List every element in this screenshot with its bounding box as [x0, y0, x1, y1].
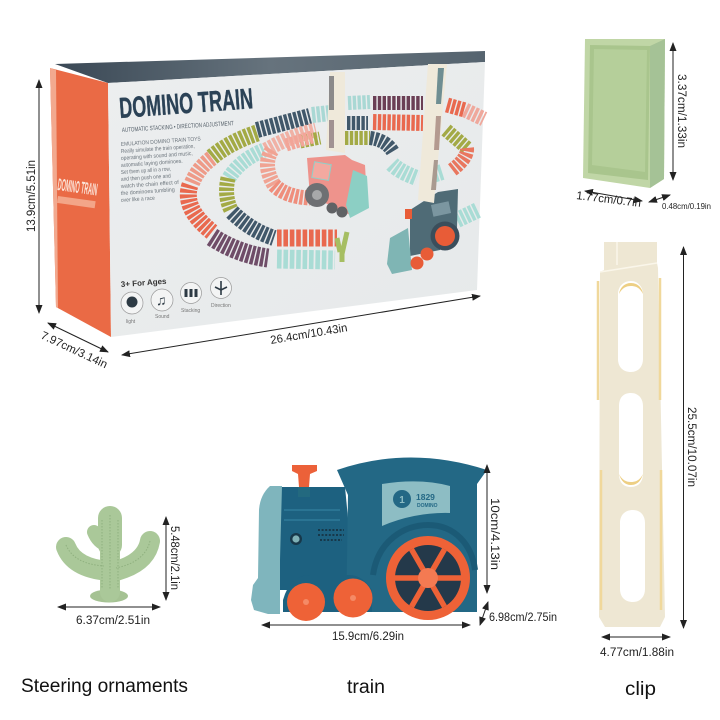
- icon: sound: Sound: [155, 314, 170, 320]
- train nameplate: 1829: [416, 492, 435, 502]
- box description: Really simulate the train operation,: [121, 144, 195, 155]
- dimension: clip height: 25.5cm/10.07in: [685, 407, 697, 487]
- dimension: domino thickness: 0.48cm/0.19in: [662, 202, 711, 211]
- dimension: clip width: 4.77cm/1.88in: [600, 647, 674, 659]
- caption: steering ornaments: Steering ornaments: [21, 676, 188, 697]
- dimension: train depth: [480, 602, 557, 625]
- dimension: cactus height: [166, 517, 180, 600]
- domino track: [188, 102, 484, 262]
- feature icons: [121, 278, 232, 325]
- train main wheel: [386, 536, 470, 620]
- small cactus ornament on box: [337, 232, 347, 262]
- train nameplate: [382, 481, 450, 526]
- box description: operating with sound and music,: [121, 151, 193, 162]
- box description: Set them up all in a row,: [121, 166, 171, 176]
- dimension: box depth: 7.97cm/3.14in: [39, 330, 109, 371]
- box subtitle: AUTOMATIC STACKING • DIRECTION ADJUSTMENT: [122, 120, 234, 134]
- ages heading: 3+ For Ages: [121, 277, 167, 289]
- caption: clip: clip: [625, 679, 656, 700]
- train boiler: [280, 487, 352, 590]
- cactus: [66, 515, 150, 602]
- dimension: domino width: 1.77cm/0.7in: [576, 190, 642, 210]
- box side panel: [50, 68, 111, 337]
- dimension: box width: [122, 296, 480, 355]
- icon: stacking: Stacking: [181, 308, 200, 314]
- dimension: clip width: [600, 637, 674, 659]
- box description: the dominoes tumbling: [121, 187, 175, 197]
- dimension: box height: 13.9cm/5.51in: [26, 160, 38, 232]
- box title: DOMINO TRAIN: [118, 83, 254, 125]
- train wheel arch: [373, 525, 475, 575]
- box description: over like a race: [121, 196, 155, 204]
- dimension: box width: 26.4cm/10.43in: [270, 322, 348, 347]
- blue train on box: [387, 189, 460, 274]
- dimension: domino height: [673, 43, 687, 180]
- dimension: train depth: 6.98cm/2.75in: [489, 612, 557, 624]
- train cab: [337, 458, 487, 612]
- main train: [251, 458, 487, 621]
- train front plate: [251, 486, 282, 614]
- train chimney: [292, 465, 317, 487]
- box description: watch the chain effect of: [120, 180, 179, 190]
- product box: [50, 51, 485, 337]
- box top flap: [55, 51, 485, 83]
- pink train on box: [305, 155, 369, 218]
- dimension: train length: 15.9cm/6.29in: [332, 631, 404, 643]
- dimension: domino thickness: [649, 195, 711, 211]
- dimension: cactus width: [58, 607, 160, 627]
- clip: [598, 242, 665, 627]
- box description: automatic laying dominoes.: [121, 159, 183, 169]
- domino stacking towers on box: [326, 64, 447, 203]
- train front wheels: [283, 575, 372, 621]
- box description: EMULATION DOMINO TRAIN TOYS: [121, 136, 201, 148]
- train speaker dots: [318, 530, 344, 540]
- product box: DOMINO TRAIN: [56, 175, 99, 200]
- icon: light: light: [126, 319, 136, 325]
- dimension: cactus width: 6.37cm/2.51in: [76, 615, 150, 627]
- domino piece: [583, 39, 665, 188]
- train button: [290, 533, 302, 545]
- dimension: domino height: 3.37cm/1.33in: [675, 74, 687, 148]
- train nameplate: 1: [399, 495, 405, 506]
- icon: sound: ♫: [156, 292, 166, 308]
- icon: direction: Direction: [211, 303, 231, 309]
- dimension: train height: 10cm/4.13in: [488, 498, 500, 570]
- caption: train: train: [347, 677, 385, 698]
- box front panel: [108, 62, 485, 337]
- box description: and then push one and: [121, 174, 171, 183]
- dimension: cactus height: 5.48cm/2.1in: [168, 526, 180, 590]
- train nameplate: DOMINO: [417, 503, 438, 509]
- dimension: train height: [487, 465, 500, 593]
- icon: sound: [151, 289, 173, 320]
- box description: [120, 136, 201, 204]
